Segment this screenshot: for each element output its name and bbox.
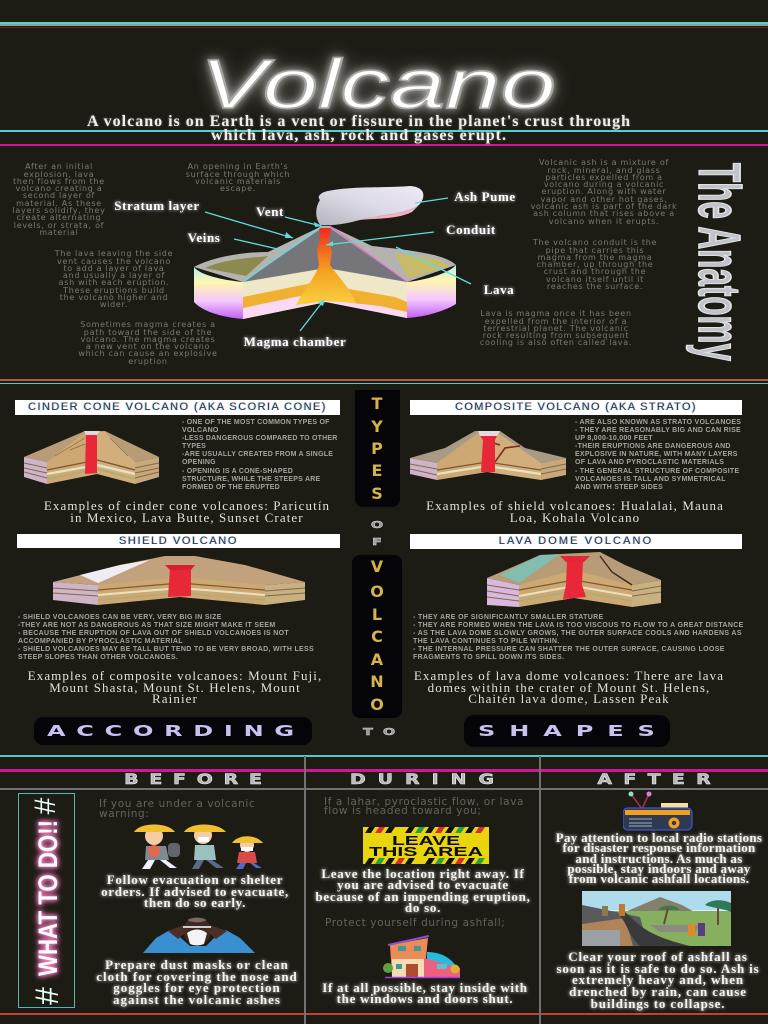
label: lava: Lava [484, 282, 514, 297]
text: stratum explanation: second layer of [23, 191, 95, 200]
text: clear roof: extremely heavy and, when [572, 972, 744, 987]
text: dust masks [94, 957, 299, 1009]
text: clear roof [556, 951, 760, 1010]
text: evacuation orders: orders. If advised to evacuate, [101, 884, 289, 898]
text: dust masks: Prepare dust masks or clean [105, 957, 289, 972]
text: ash explanation: ash column that rises above a [533, 209, 675, 218]
text: leave location: you are advised to evacuate [337, 877, 509, 892]
label: vent: Vent [256, 204, 284, 219]
word: shapes [464, 715, 670, 747]
examples: composite: Mount Shasta, Mount St. Helens, Mount [49, 680, 301, 695]
card: cinder cone volcano [15, 400, 340, 525]
word: to: O [383, 727, 395, 738]
vertical heading: types [355, 390, 400, 507]
icon: ash plume [316, 186, 423, 225]
facts: cinder cone: OPENING [182, 459, 216, 466]
text: radio stations [556, 833, 762, 885]
facts: shield: - SHIELD VOLCANOES MAY BE TALL BUT TEND TO BE VERY BROAD, WITH LESS [18, 646, 314, 653]
facts: cinder cone: -ARE USUALLY CREATED FROM A SINGLE [182, 451, 333, 458]
text: radio stations: possible, stay indoors and away [567, 861, 751, 876]
examples: composite [28, 668, 322, 706]
text: magma explanation [78, 320, 218, 366]
illustration: lava dome [487, 552, 661, 607]
vertical heading: volcano: V [371, 557, 383, 576]
header: shield: SHIELD VOLCANO [119, 535, 238, 547]
card: composite volcano [410, 400, 742, 525]
text: vent explanation: surface through which [186, 170, 290, 179]
text: veins explanation: vent causes the volcano [57, 257, 171, 266]
facts: composite: - THE GENERAL STRUCTURE OF COMPOSITE [575, 468, 739, 475]
examples: cinder cone [44, 498, 330, 525]
text: stratum explanation: explosion, lava [24, 170, 94, 179]
card: shield volcano [17, 534, 340, 706]
text: veins explanation [54, 249, 173, 309]
text: stay inside: If at all possible, stay inside with [322, 980, 528, 995]
facts: composite: EXPLOSIVE IN NATURE, WITH MANY LAYERS [575, 451, 738, 458]
text: dust masks: against the volcanic ashes [113, 992, 281, 1007]
vertical heading: volcano: A [371, 650, 383, 669]
subtitle definition: A volcano is on Earth is a vent or fissure in the planet's crust through [87, 113, 631, 130]
note: lahar warning: If a lahar, pyroclastic flow, or lava [324, 796, 524, 808]
text: radio stations: from volcanic ashfall locations. [569, 871, 749, 886]
text: conduit explanation: reaches the surface. [547, 282, 643, 291]
text: stay inside: the windows and doors shut. [337, 991, 513, 1006]
text: evacuation orders: then do so early. [144, 895, 246, 910]
facts: composite: OF LAVA AND PYROCLASTIC MATERIALS [575, 459, 724, 466]
text: stratum explanation: then flows from the [13, 177, 105, 186]
header: composite [410, 400, 742, 415]
word: shapes: SHAPES [478, 722, 669, 740]
icon: house [383, 935, 461, 979]
text: veins explanation: The lava leaving the side [55, 249, 173, 258]
facts: cinder cone: - ONE OF THE MOST COMMON TYPES OF [182, 419, 330, 426]
vertical heading: of: F [372, 537, 382, 548]
examples: cinder cone: in Mexico, Lava Butte, Sunset Crater [70, 510, 304, 525]
text: conduit explanation: chamber, up through the [537, 260, 653, 269]
panel: types of volcano [15, 390, 744, 747]
vertical heading: types: E [372, 461, 382, 480]
vertical heading: of: O [371, 520, 383, 531]
column: after [541, 772, 766, 1012]
facts: shield: ACCOMPANIED BY PYROCLASTIC MATERIAL [18, 638, 183, 645]
word: to [362, 727, 395, 738]
text: leave location: Leave the location right away. If [321, 866, 525, 881]
text: veins explanation: and usually a layer of [63, 271, 165, 280]
vertical heading: types: T [372, 394, 382, 413]
text: clear roof: drenched by rain, can cause [569, 984, 747, 999]
examples: composite: Examples of composite volcanoes: Mount Fuji, [28, 668, 322, 683]
text: evacuation orders: Follow evacuation or shelter [107, 872, 283, 887]
text: lava explanation: rock resulting from subsequent [483, 331, 629, 340]
facts: composite: -THEIR ERUPTIONS ARE DANGEROUS AND [575, 443, 731, 450]
vertical heading: volcano: L [372, 605, 382, 624]
volcano cross-section diagram [194, 186, 472, 332]
facts: shield: - SHIELD VOLCANOES CAN BE VERY, VERY BIG IN SIZE [18, 614, 222, 621]
text: conduit explanation: magma from the magma [538, 253, 652, 262]
vertical heading: volcano: O [370, 695, 384, 714]
text: dust masks: cloth for covering the nose and [96, 969, 298, 984]
text: magma explanation: which can cause an explosive [78, 349, 218, 358]
examples: shield: Loa, Kohala Volcano [510, 510, 640, 525]
text: ash explanation: volcano when it erupts. [549, 217, 659, 226]
text: clear roof: soon as it is safe to do so. Ash is [556, 961, 760, 976]
facts: shield: - BECAUSE THE ERUPTION OF LAVA OUT OF SHIELD VOLCANOES IS NOT [18, 630, 289, 637]
text: vent explanation [186, 162, 290, 193]
text: ash explanation: rock, mineral, and glass [547, 166, 661, 175]
label: conduit: Conduit [446, 222, 496, 237]
header: shield [17, 534, 340, 548]
facts: cinder cone: STRUCTURE, WHILE THE STEEPS ARE [182, 476, 320, 483]
text: magma explanation: a new vent on the volcano [86, 342, 210, 351]
text: lava explanation: cooling is also often called lava. [480, 338, 632, 347]
facts: lava dome: - THE INTERNAL PRESSURE CAN SHATTER THE OUTER SURFACE, CAUSING LOOSE [413, 646, 725, 653]
sign: leave this area: LEAVE [392, 834, 460, 848]
text: stratum explanation: material [39, 228, 79, 237]
label: magma chamber: Magma chamber [244, 334, 346, 349]
header: lava dome: LAVA DOME VOLCANO [499, 535, 653, 547]
facts: lava dome [413, 614, 744, 661]
text: vent explanation: escape. [220, 184, 256, 193]
text: stratum explanation: levels, or strata, of [14, 221, 104, 230]
sign: leave this area [363, 827, 489, 864]
text: dust masks: goggles for eye protection [113, 980, 281, 995]
illustration: composite volcano [410, 431, 566, 480]
text: leave location: do so. [405, 900, 441, 915]
text: stratum explanation: layers solidify, they [12, 206, 106, 215]
text: stay inside [322, 982, 528, 1005]
text: magma explanation: volcano. The magma creates [81, 335, 215, 344]
examples: lava dome: Examples of lava dome volcanoes: There are lava [414, 668, 724, 683]
text: lava explanation: Lava is magma once it has been [480, 309, 632, 318]
text: magma explanation: path toward the side of the [84, 328, 212, 337]
heading: during: DURING [350, 772, 506, 788]
illustration: clearing ash from roof [582, 891, 731, 946]
facts: cinder cone: - OPENING IS A CONE-SHAPED [182, 468, 293, 475]
label: veins: Veins [188, 230, 220, 245]
word: according [34, 717, 312, 745]
word: to: T [363, 727, 373, 738]
text: lava explanation: expelled from the interior of a [485, 317, 627, 326]
header: cinder cone: CINDER CONE VOLCANO (AKA SCORIA CONE) [28, 401, 327, 413]
facts: shield [18, 614, 314, 661]
heading: before: BEFORE [124, 772, 273, 788]
text: lava explanation: terrestrial planet. The volcanic [483, 324, 629, 333]
text: ash explanation: eruption. Along with water [541, 187, 667, 196]
icon: person with dust mask [143, 917, 255, 953]
text: stratum explanation: After an initial [25, 162, 93, 171]
label: ash pume: Ash Pume [454, 189, 516, 204]
subtitle definition [86, 113, 631, 145]
text: conduit explanation [532, 238, 657, 291]
text: radio stations: for disaster response information [562, 840, 756, 855]
text: veins explanation: wider. [100, 300, 128, 309]
text: conduit explanation: volcano itself until it [546, 275, 644, 284]
facts: cinder cone: FORMED OF THE ERUPTED [182, 484, 280, 491]
facts: lava dome: THE LAVA CONTINUES TO PILE WITHIN. [413, 638, 560, 645]
text: ash explanation: vapor and other hot gases, [540, 195, 668, 204]
vertical heading: types: S [371, 484, 383, 503]
text: veins explanation: ash with each eruption. [59, 278, 169, 287]
text: vent explanation: volcanic materials [195, 177, 281, 186]
facts: lava dome: - THEY ARE FORMED WHEN THE LAVA IS TOO VISCOUS TO FLOW TO A GREAT DISTANCE [413, 622, 744, 629]
text: ash explanation: Volcanic ash is a mixture of [539, 158, 669, 167]
facts: cinder cone: VOLCANO [182, 427, 219, 434]
icon: radio [623, 791, 693, 831]
text: conduit explanation: The volcano conduit is the [533, 238, 657, 247]
facts: lava dome: - THEY ARE OF SIGNIFICANTLY SMALLER STATURE [413, 614, 604, 621]
facts: composite: - ARE ALSO KNOWN AS STRATO VOLCANOES [575, 419, 741, 426]
text: ash explanation [531, 158, 677, 226]
examples: lava dome: domes within the crater of Mount St. Helens, [428, 680, 710, 695]
facts: cinder cone [182, 419, 338, 491]
text: magma explanation: eruption [128, 357, 168, 366]
word: according: ACCORDING [47, 722, 305, 740]
text: conduit explanation: crust and through the [544, 267, 646, 276]
text: stratum explanation: create alternating [17, 213, 101, 222]
examples: shield: Examples of shield volcanoes: Hualalai, Mauna [426, 498, 724, 513]
illustration: shield volcano [53, 556, 305, 605]
facts: shield: STEEP SLOPES THAN OTHER VOLCANOES. [18, 654, 178, 661]
facts: lava dome: FRAGMENTS TO SPILL DOWN ITS SIDES. [413, 654, 564, 661]
text: radio stations: and instructions. As much as [575, 851, 743, 866]
column: before [94, 772, 299, 1009]
header: lava dome [410, 534, 742, 549]
vertical heading: volcano: N [370, 672, 384, 691]
text: leave location [315, 868, 531, 914]
note: protect yourself: Protect yourself during ashfall; [325, 917, 505, 929]
heading: after: AFTER [597, 772, 722, 788]
note: lahar warning [324, 796, 524, 817]
text: veins explanation: to add a layer of lava [63, 264, 165, 273]
arrows to diagram parts [205, 198, 471, 331]
facts: shield: -THEY ARE NOT AS DANGEROUS AS THAT SIZE MIGHT MAKE IT SEEM [18, 622, 275, 629]
text: vent explanation: An opening in Earth's [188, 162, 288, 171]
vertical heading: types: P [371, 439, 383, 458]
text: ash explanation: volcanic ash is part of the dark [531, 202, 677, 211]
text: stratum explanation [12, 162, 106, 237]
text: clear roof: Clear your roof of ashfall as [568, 949, 748, 964]
header: composite: COMPOSITE VOLCANO (AKA STRATO) [455, 401, 697, 413]
text: conduit explanation: pipe that carries this [546, 246, 644, 255]
text: stratum explanation: volcano creating a [16, 184, 102, 193]
label: stratum layer: Stratum layer [114, 198, 200, 213]
vertical heading: types: Y [371, 417, 383, 436]
vertical heading: volcano: C [371, 627, 383, 646]
vertical heading: of [371, 520, 383, 548]
side banner: what to do: # [29, 987, 65, 1005]
title: Volcano [200, 45, 556, 123]
column: during [313, 772, 532, 1006]
vertical heading: volcano [352, 555, 402, 718]
text: magma explanation: Sometimes magma creates a [80, 320, 216, 329]
vertical heading: volcano: O [370, 582, 384, 601]
text: ash explanation: volcano during a volcanic [544, 180, 664, 189]
examples: lava dome [414, 668, 724, 706]
text: evacuation orders [99, 872, 290, 912]
examples: lava dome: Chaitén lava dome, Lassen Peak [468, 691, 670, 706]
facts: cinder cone: TYPES [182, 443, 206, 450]
text: stratum explanation: material. As these [16, 199, 102, 208]
facts: composite: VOLCANOES IS TALL AND SYMMETRICAL [575, 476, 726, 483]
text: leave location: because of an impending eruption, [315, 889, 531, 904]
facts: lava dome: - AS THE LAVA DOME SLOWLY GROWS, THE OUTER SURFACE COOLS AND HARDENS AS [413, 630, 742, 637]
icon: evacuating family [134, 824, 263, 869]
text: veins explanation: These eruptions build [63, 286, 165, 295]
facts: composite: - THEY ARE REASONABLY BIG AND CAN RISE [575, 427, 741, 434]
facts: composite: UP 8,000-10,000 FEET [575, 435, 653, 442]
note: volcanic warning [99, 798, 255, 820]
examples: composite: Rainier [152, 691, 198, 706]
note: lahar warning: flow is headed toward you; [324, 805, 482, 817]
facts: composite: AND WITH STEEP SIDES [575, 484, 663, 491]
side banner: what to do [18, 793, 75, 1008]
side banner: what to do: # [29, 797, 62, 814]
facts: cinder cone: -LESS DANGEROUS COMPARED TO OTHER [182, 435, 338, 442]
subtitle definition: which lava, ash, rock and gases erupt. [211, 127, 507, 144]
text: clear roof: buildings to collapse. [591, 996, 725, 1011]
text: veins explanation: the volcano higher and [60, 293, 168, 302]
sign: leave this area: THIS AREA [369, 845, 483, 859]
text: ash explanation: particles expelled from a [545, 173, 663, 182]
examples: cinder cone: Examples of cinder cone volcanoes: Paricutín [44, 498, 330, 513]
panel: the anatomy [12, 158, 744, 366]
note: volcanic warning: warning: [99, 808, 149, 820]
text: lava explanation [480, 309, 632, 347]
text: radio stations: Pay attention to local radio stations [556, 830, 762, 845]
facts: composite [575, 419, 741, 491]
illustration: cinder cone [24, 431, 160, 484]
volcano body [194, 226, 456, 319]
card: lava dome volcano [410, 534, 744, 706]
note: volcanic warning: If you are under a volcanic [99, 798, 255, 810]
examples: shield [426, 498, 724, 525]
panel: what to do [18, 772, 764, 1013]
